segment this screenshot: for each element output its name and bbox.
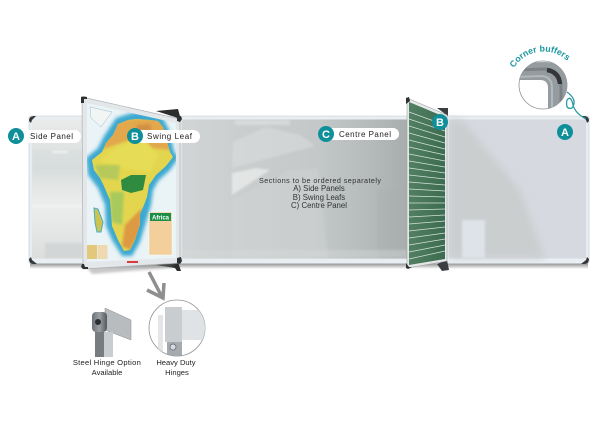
label: A right xyxy=(557,124,573,140)
label: A Side Panel: Side Panel xyxy=(30,132,73,141)
label: B Swing Leaf xyxy=(127,128,200,144)
label: C Centre Panel: C xyxy=(322,129,330,141)
icon: steel hinge xyxy=(92,308,131,357)
caption: heavy duty hinges: Heavy Duty xyxy=(156,358,196,367)
text block: ordering notes: B) Swing Leafs xyxy=(293,193,345,202)
right panel reflections xyxy=(449,120,545,258)
text block: ordering notes: Sections to be ordered separately xyxy=(259,176,381,185)
hinges xyxy=(156,109,181,120)
centre panel reflections xyxy=(181,120,407,258)
curved heading: Corner buffers xyxy=(510,45,570,67)
panel: swing leaf with map xyxy=(81,96,182,274)
text block: ordering notes: A) Side Panels xyxy=(293,184,345,193)
label: C Centre Panel xyxy=(318,126,399,142)
label: A Side Panel: A xyxy=(12,131,20,143)
leaf corners xyxy=(81,96,87,103)
label: B Swing Leaf: Swing Leaf xyxy=(147,132,193,141)
callout: heavy duty hinge xyxy=(149,300,206,357)
label: A right: A xyxy=(561,127,569,139)
red tag xyxy=(127,261,138,263)
caption: steel hinge: Steel Hinge Option xyxy=(73,358,141,367)
map sea xyxy=(87,103,176,262)
side panel surface xyxy=(32,120,82,258)
label: B green leaf xyxy=(432,114,448,130)
centre panel surface xyxy=(181,120,407,258)
right panel surface xyxy=(449,120,586,258)
squiggle connector xyxy=(567,92,586,119)
Madagascar xyxy=(94,208,103,232)
land xyxy=(92,119,173,251)
text block: ordering notes xyxy=(259,176,381,210)
map inset xyxy=(90,107,112,127)
text block: ordering notes: C) Centre Panel xyxy=(291,201,347,210)
label: A Side Panel xyxy=(8,128,81,144)
corner buffers on board xyxy=(29,116,589,264)
whiteboard xyxy=(29,116,589,264)
callout: corner buffers xyxy=(510,45,586,120)
map legend xyxy=(87,245,97,259)
rainforest xyxy=(121,175,146,193)
arrow: hinge pointer xyxy=(147,272,164,298)
board shadow xyxy=(30,262,588,269)
sea halo xyxy=(86,112,179,256)
panel: green swing leaf xyxy=(406,97,449,271)
label: C Centre Panel: Centre Panel xyxy=(339,130,391,139)
label: B Swing Leaf: B xyxy=(131,131,139,143)
caption: steel hinge: Available xyxy=(92,368,122,377)
map label box: Africa xyxy=(152,216,170,222)
label: B green leaf: B xyxy=(436,117,444,129)
panel joint xyxy=(179,117,182,263)
caption: heavy duty hinges: Hinges xyxy=(165,368,189,377)
side panel reflections xyxy=(33,150,82,258)
map label box xyxy=(149,212,172,255)
